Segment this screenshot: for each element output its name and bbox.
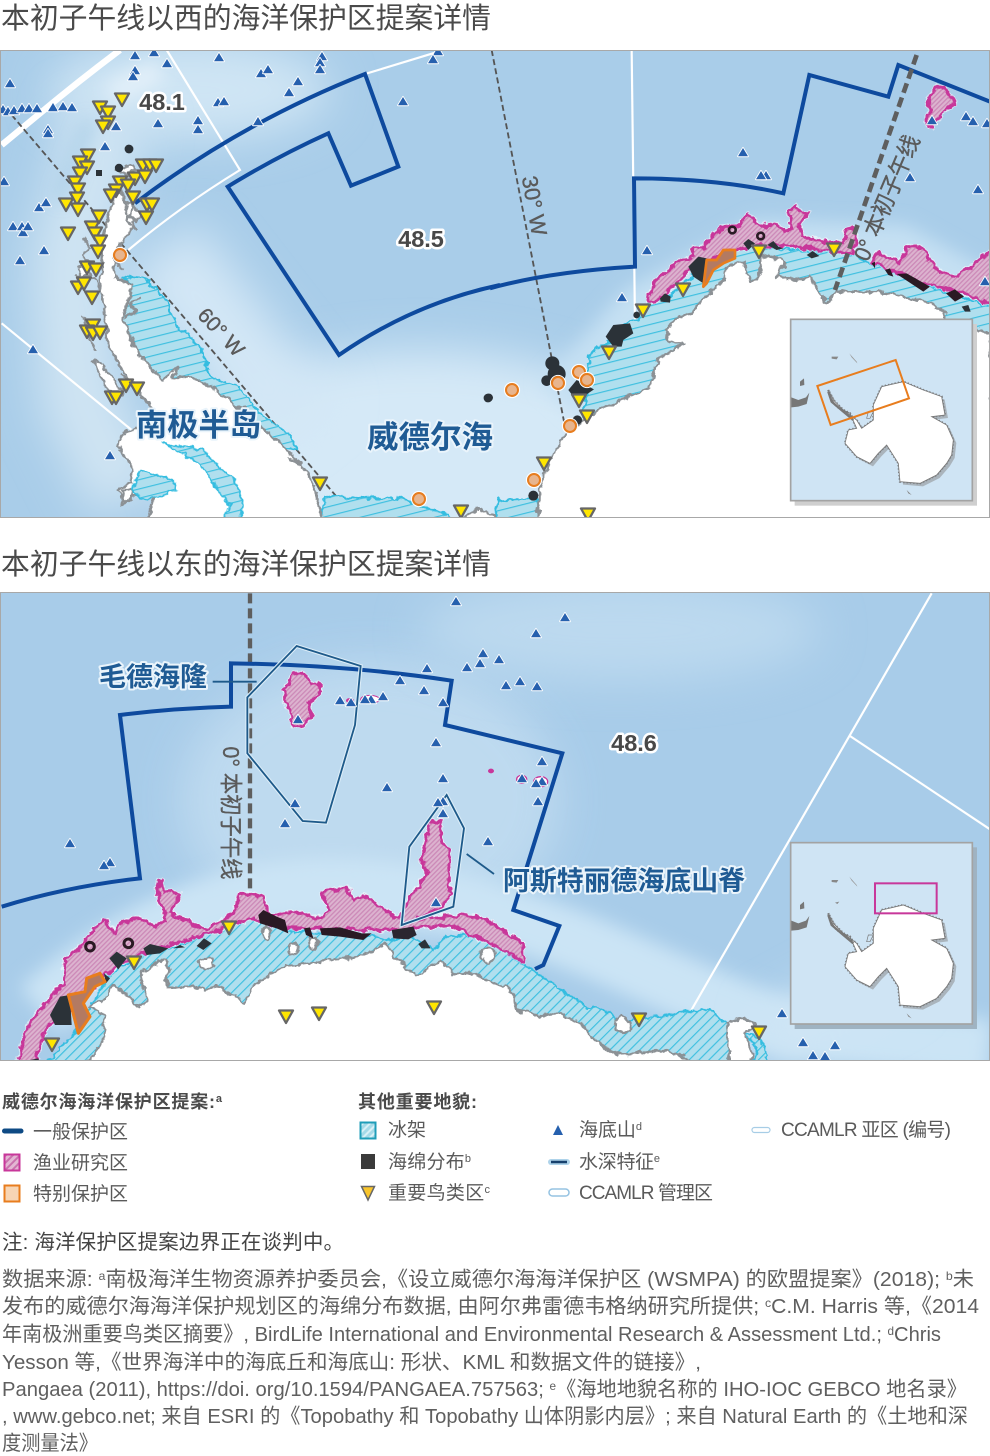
prime meridian line — [243, 593, 256, 993]
fisheries zone halo — [17, 672, 523, 1067]
meridian line: 60 W — [12, 116, 337, 496]
special protection zone key: 特别保护区 — [33, 1183, 128, 1205]
data sources: 《海地地貌名称的 IHO-IOC GEBCO 地名录》 — [556, 1378, 967, 1401]
legend: proposal zones — [2, 1091, 223, 1205]
map frame — [0, 50, 990, 518]
general protection zone — [2, 663, 562, 969]
title: west of prime meridian: 本初子午线以西的海洋保护区提案详情 — [1, 3, 491, 35]
CCAMLR management area key: CCAMLR 管理区 — [579, 1182, 713, 1204]
land: offshore islands — [78, 165, 493, 527]
subarea label 48.6: 48.6 — [611, 730, 657, 756]
bird area key: 重要鸟类区 — [388, 1183, 484, 1204]
data sources: e — [550, 1379, 556, 1393]
coast and land — [75, 87, 990, 527]
CCAMLR subarea boundaries — [668, 593, 990, 1050]
inset: location map — [791, 319, 977, 506]
place label: Antarctic Peninsula: 南极半岛 — [136, 408, 261, 443]
legend heading: 威德尔海海洋保护区提案: — [2, 1092, 215, 1112]
ice shelf hatching — [124, 248, 989, 517]
callout line: Astrid Ridge — [467, 854, 494, 874]
general protection zone key: 一般保护区 — [33, 1121, 128, 1143]
data sources: 发布的威德尔海海洋保护规划区的海绵分布数据, 由阿尔弗雷德韦格纳研究所提供; — [2, 1295, 740, 1318]
sponge key: 海绵分布 — [388, 1152, 465, 1173]
bathymetric feature: Maud Rise outline — [247, 646, 361, 823]
subarea label 48.1: 48.1 — [139, 89, 185, 115]
legend: other features — [358, 1092, 951, 1204]
bathymetric feature key — [551, 1151, 660, 1173]
legend heading: 其他重要地貌: — [358, 1092, 477, 1112]
bathymetric feature key: 水深特征 — [579, 1152, 654, 1173]
seamount key — [553, 1119, 642, 1141]
sponge distribution — [485, 227, 971, 501]
small fisheries research patches — [346, 695, 548, 787]
sponge key: b — [465, 1153, 471, 1165]
map panel: east of prime meridian — [0, 580, 990, 1073]
fisheries research zone hatching — [648, 88, 989, 302]
data sources — [2, 1268, 979, 1455]
data sources: C.M. Harris 等,《2014 — [771, 1295, 979, 1318]
sea background — [0, 580, 990, 1061]
data sources: c — [765, 1296, 771, 1310]
data sources: , www.gebco.net; 来自 ESRI 的《Topobathy 和 Topobathy 山体阴影内层》; 来自 Natural Earth 的《土地和深 — [2, 1405, 968, 1428]
important bird areas — [45, 922, 766, 1051]
rocky coastal fringe — [75, 207, 302, 462]
data sources: d — [888, 1324, 894, 1338]
seamounts — [65, 597, 840, 1060]
bird area key: c — [484, 1184, 490, 1196]
land: East Antarctica coast — [85, 943, 703, 1067]
important bird areas — [59, 94, 841, 521]
data sources: 未 — [953, 1268, 974, 1291]
subarea label 48.5: 48.5 — [398, 226, 444, 252]
label: 60 W: 60° W — [193, 304, 249, 362]
seamounts — [0, 47, 990, 459]
feature label: Maud Rise: 毛德海隆 — [99, 662, 208, 692]
ice shelf hatching — [0, 590, 990, 1073]
CCAMLR subarea key: CCAMLR 亚区 (编号) — [781, 1119, 951, 1141]
data sources: b — [946, 1269, 953, 1283]
label: prime meridian: 0° 本初子午线 — [218, 746, 244, 880]
fisheries research zone key: 渔业研究区 — [33, 1152, 128, 1174]
seamount key: 海底山 — [579, 1120, 636, 1141]
legend heading: a — [216, 1093, 223, 1105]
data sources: Yesson 等,《世界海洋中的海底丘和海底山: 形状、KML 和数据文件的链接》, — [2, 1351, 701, 1374]
ice shelf outlines — [123, 247, 990, 527]
label: prime meridian: 0° 本初子午线 — [848, 131, 925, 265]
seamount key: d — [636, 1121, 642, 1133]
ice shelf outlines — [43, 918, 772, 1067]
map panel: west of prime meridian — [1, 51, 989, 517]
data sources: 数据来源: — [2, 1268, 90, 1291]
land: East Antarctica coast — [538, 257, 990, 527]
CCAMLR subarea boundaries — [1, 51, 636, 430]
callout line: Maud Rise — [213, 679, 257, 684]
fisheries research zone hatching — [0, 590, 990, 1073]
prime meridian line — [835, 55, 917, 290]
sea background — [1, 51, 989, 517]
general protection zone — [135, 65, 990, 355]
map frame — [0, 592, 990, 1060]
sponge distribution — [30, 910, 431, 1063]
coastal ice rises — [199, 927, 630, 1033]
data sources: Pangaea (2011), https://doi. org/10.1594/PANGAEA.757563; — [2, 1378, 554, 1401]
data sources: 南极海洋生物资源养护委员会,《设立威德尔海海洋保护区 (WSMPA) 的欧盟提案》(2018); — [105, 1268, 946, 1291]
ice shelf key: 冰架 — [388, 1119, 426, 1141]
sponge dots — [96, 145, 492, 402]
fisheries zone halo — [647, 87, 990, 307]
land: Antarctic Peninsula — [100, 190, 325, 527]
special protection zone — [68, 973, 105, 1033]
sponge key — [361, 1151, 471, 1173]
bathymetric feature key: e — [654, 1153, 660, 1165]
peninsula shelf hatching — [132, 446, 243, 517]
feature label: Astrid Ridge: 阿斯特丽德海底山脊 — [503, 866, 746, 896]
special protection zone — [703, 250, 735, 287]
data sources: Chris — [894, 1323, 941, 1346]
ice shelf key — [360, 1119, 426, 1141]
note: 注: 海洋保护区提案边界正在谈判中。 — [2, 1231, 344, 1254]
data sources: 年南极洲重要鸟类区摘要》, BirdLife International and Environmental Research & Assessment Ltd.; — [2, 1323, 903, 1346]
fisheries research zone outline — [17, 672, 523, 1067]
place label: Weddell Sea: 威德尔海 — [367, 420, 493, 455]
shelf and fisheries zone outlines — [132, 87, 990, 527]
coast and land — [17, 672, 772, 1067]
special protection circles — [112, 247, 595, 507]
title: east of prime meridian: 本初子午线以东的海洋保护区提案详情 — [1, 549, 491, 581]
data sources: 度测量法》 — [2, 1432, 98, 1455]
meridian line: 30 W — [492, 50, 565, 427]
bathymetric feature: Astrid Ridge outline — [402, 795, 464, 925]
inset: location map — [791, 843, 977, 1029]
data sources: a — [99, 1269, 106, 1283]
label: 30 W: 30° W — [517, 174, 552, 238]
